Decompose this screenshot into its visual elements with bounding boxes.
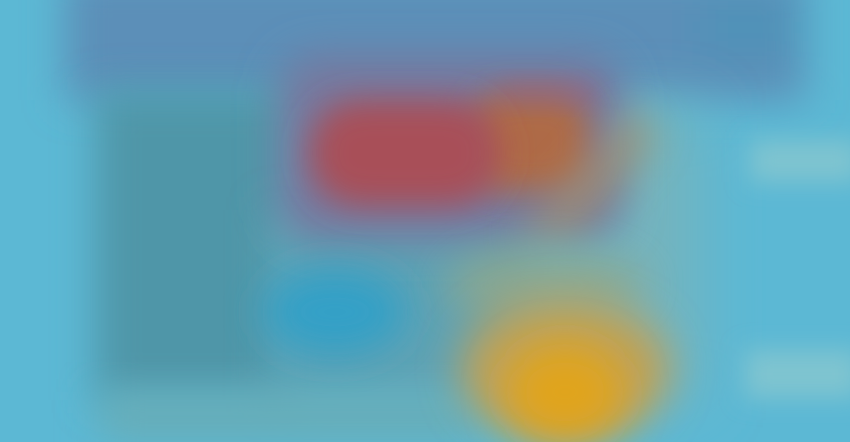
block: olive transition xyxy=(445,247,645,323)
panel: right fade xyxy=(590,110,700,400)
block: right lower light bar xyxy=(745,350,850,398)
block: blue spot xyxy=(263,268,407,356)
panel: left body xyxy=(95,90,295,400)
panel: purple halo xyxy=(278,55,623,240)
panel: lower strip xyxy=(100,392,480,442)
block: red highlight xyxy=(310,100,500,206)
panel: top band xyxy=(65,0,805,100)
block: right upper light bar xyxy=(750,140,850,182)
block: yellow core xyxy=(505,342,625,442)
block: orange diagonal streak xyxy=(515,105,660,240)
panel: centre body xyxy=(270,210,530,400)
block: orange highlight xyxy=(470,92,590,192)
block: rose top edge xyxy=(500,82,595,104)
block: amber glow xyxy=(460,298,670,442)
